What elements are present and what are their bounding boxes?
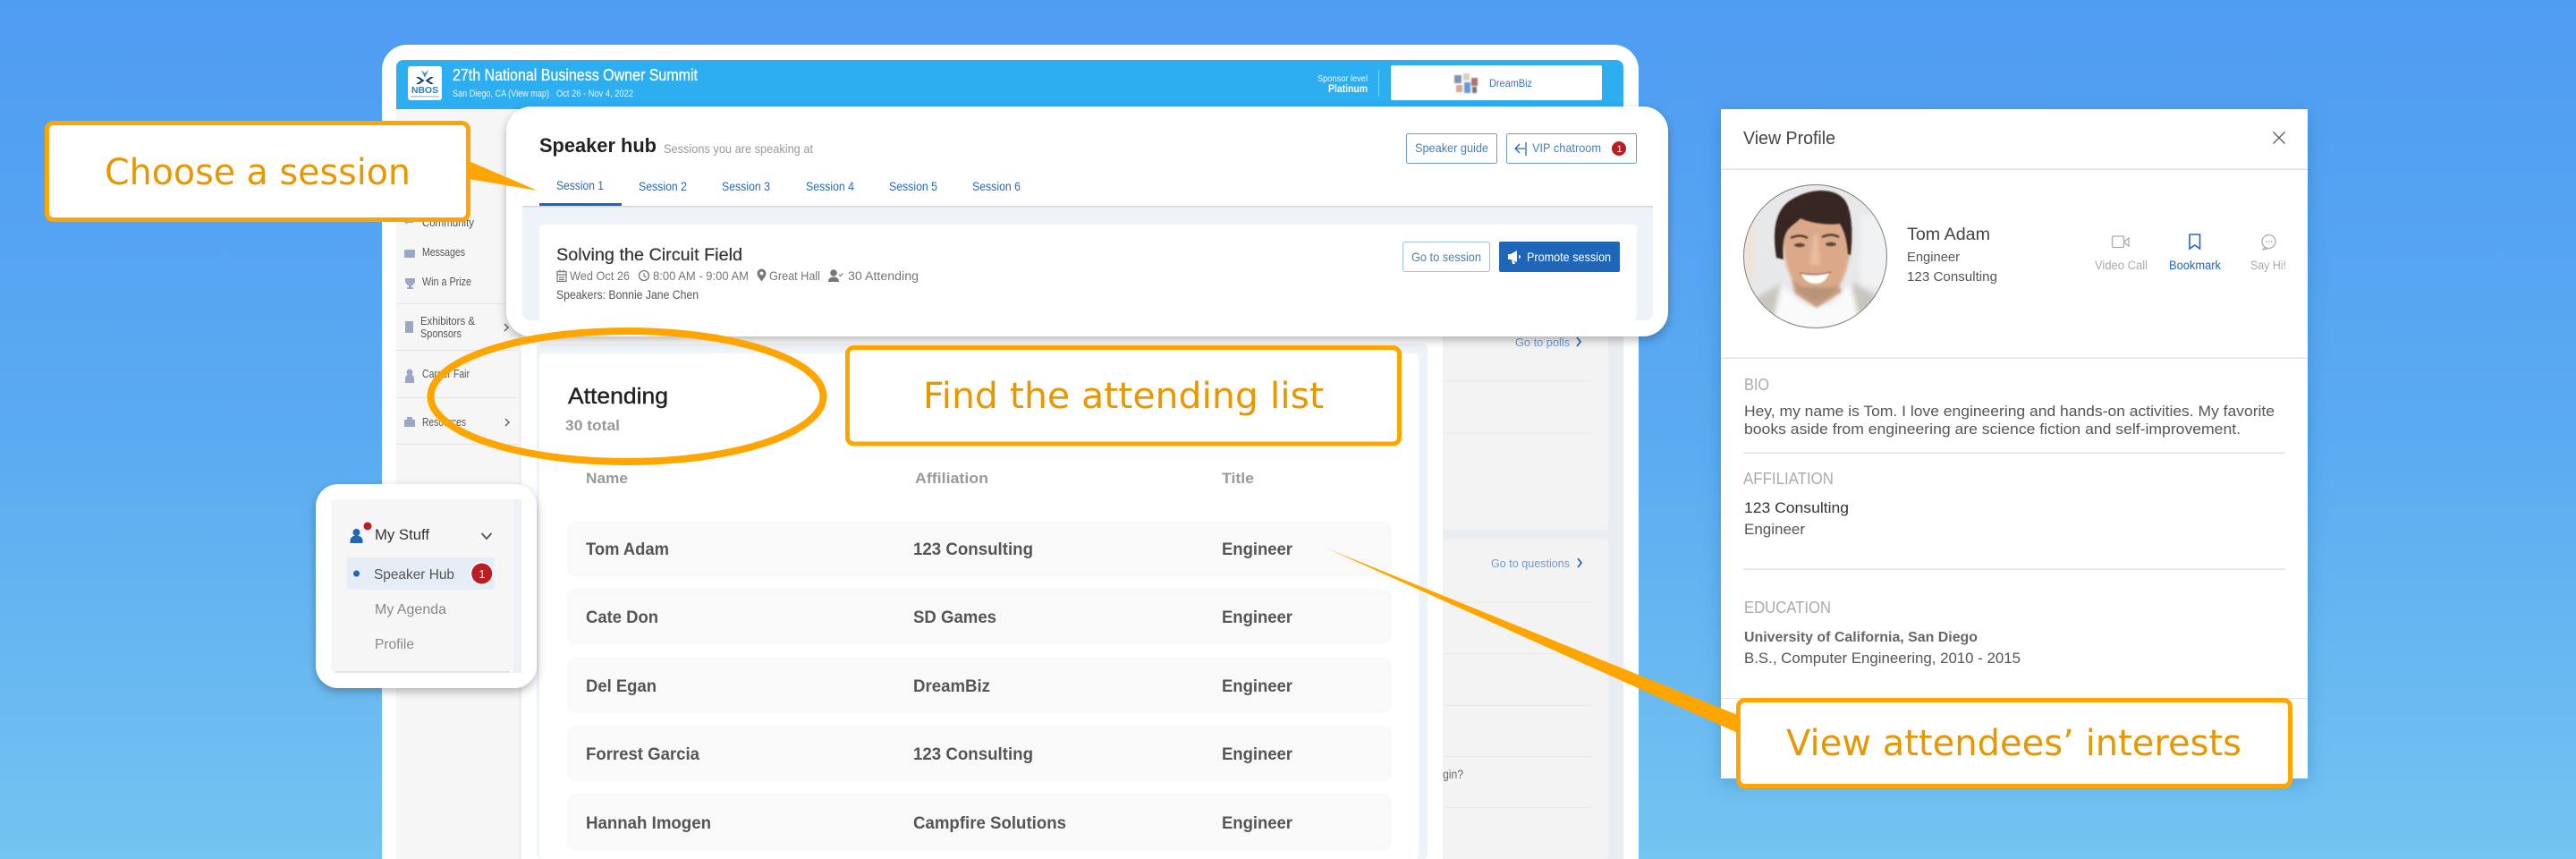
icon: sponsor logo bbox=[1454, 73, 1478, 93]
button: Go to session: Go to session bbox=[1411, 250, 1481, 264]
section: education bbox=[1744, 599, 2021, 667]
callout: Find the attending list bbox=[848, 347, 1399, 444]
callout: Find the attending list: Find the attending list bbox=[923, 376, 1324, 417]
session tabs bbox=[522, 178, 1653, 208]
left navigation sidebar bbox=[396, 109, 521, 859]
icon: close bbox=[2274, 132, 2284, 143]
right column: polls and questions bbox=[1443, 304, 1623, 859]
table row: Hannah Imogen: Campfire Solutions bbox=[913, 814, 1066, 833]
sponsor level: Platinum bbox=[1328, 82, 1368, 95]
profile panel title: View Profile bbox=[1743, 129, 1835, 149]
nav item: Community: Community bbox=[422, 216, 474, 229]
session date: Wed Oct 26 bbox=[570, 268, 630, 283]
menu item: My Agenda: My Agenda bbox=[375, 602, 446, 617]
session tabs: Session 3 bbox=[722, 179, 770, 193]
sponsor badge: DreamBiz bbox=[1391, 65, 1602, 100]
heading: Speaker hub bbox=[539, 134, 813, 157]
arrow: from attendee row to profile bbox=[1329, 549, 1740, 734]
heading: Attending: 30 total bbox=[565, 417, 620, 434]
callout: Choose a session bbox=[47, 123, 538, 220]
button: Promote session bbox=[1499, 242, 1620, 272]
table header bbox=[586, 470, 1254, 487]
section: affiliation: 123 Consulting bbox=[1744, 499, 1849, 516]
section: affiliation bbox=[1743, 470, 1849, 538]
session title: Solving the Circuit Field bbox=[556, 246, 742, 265]
hair bbox=[1775, 191, 1852, 259]
heading: Speaker hub: Sessions you are speaking at bbox=[664, 141, 813, 156]
heading: Attending: Attending bbox=[568, 384, 668, 409]
callout: View attendees' interests: View attendees’ interests bbox=[1786, 723, 2241, 764]
button: Speaker guide bbox=[1406, 134, 1497, 163]
avatar photo bbox=[1743, 184, 1887, 328]
action: Video Call bbox=[2095, 236, 2148, 272]
event location and date bbox=[453, 89, 633, 99]
table row: Cate Don: Cate Don bbox=[586, 608, 658, 627]
session tabs: Session 6 bbox=[972, 179, 1021, 193]
shirt bbox=[1772, 283, 1861, 328]
section: education: EDUCATION bbox=[1744, 599, 1831, 617]
table row: Forrest Garcia: 123 Consulting bbox=[913, 745, 1033, 764]
table row: Tom Adam: Tom Adam bbox=[586, 540, 669, 559]
menu heading: My Stuff: My Stuff bbox=[375, 526, 429, 543]
table row: Cate Don bbox=[567, 589, 1392, 644]
sponsor badge: DreamBiz: DreamBiz bbox=[1489, 77, 1532, 89]
nav item: Resources: Resources bbox=[422, 415, 466, 429]
event location and date: Oct 26 - Nov 4, 2022 bbox=[556, 89, 633, 99]
nav item: Career Fair: Career Fair bbox=[422, 367, 470, 380]
section: affiliation: AFFILIATION bbox=[1743, 470, 1834, 488]
nav item: Career Fair bbox=[405, 367, 470, 383]
menu item: Speaker Hub (active) bbox=[347, 557, 494, 590]
panel: attending list bbox=[537, 344, 1428, 859]
table row: Hannah Imogen bbox=[567, 794, 1392, 850]
menu item: Speaker Hub (active): Speaker Hub bbox=[374, 567, 454, 583]
button: VIP chatroom: VIP chatroom bbox=[1532, 140, 1601, 155]
button: Speaker guide: Speaker guide bbox=[1415, 140, 1488, 155]
table header: Name bbox=[586, 470, 628, 487]
table row: Del Egan: Del Egan bbox=[586, 677, 657, 696]
table header: Affiliation bbox=[915, 470, 988, 487]
table row: Tom Adam: Engineer bbox=[1222, 540, 1293, 559]
table row: Forrest Garcia bbox=[567, 726, 1392, 781]
face bbox=[1783, 218, 1853, 288]
nav item: Exhibitors and Sponsors: Sponsors bbox=[420, 327, 462, 340]
table row: Hannah Imogen: Hannah Imogen bbox=[586, 814, 711, 833]
table row: Del Egan: Engineer bbox=[1222, 677, 1293, 696]
link: Go to polls: Go to polls bbox=[1515, 336, 1570, 349]
table row: Forrest Garcia: Forrest Garcia bbox=[586, 745, 699, 764]
heading: Speaker hub: Speaker hub bbox=[539, 134, 657, 157]
button: VIP chatroom bbox=[1506, 134, 1637, 163]
sponsor level: Sponsor level bbox=[1318, 73, 1368, 84]
session tabs: Session 1 bbox=[556, 178, 604, 192]
callout: Choose a session: Choose a session bbox=[105, 152, 411, 193]
panel: My Stuff menu bbox=[316, 484, 537, 688]
table row: Del Egan: DreamBiz bbox=[913, 677, 990, 696]
session attending count: 30 Attending bbox=[848, 268, 919, 283]
smile bbox=[1801, 273, 1829, 284]
heading: Attending bbox=[565, 384, 668, 434]
action: Bookmark bbox=[2169, 234, 2221, 272]
session location: Great Hall bbox=[769, 268, 820, 283]
section: bio: BIO bbox=[1744, 376, 1769, 394]
table row: Del Egan bbox=[567, 657, 1392, 713]
table row: Hannah Imogen: Engineer bbox=[1222, 814, 1293, 833]
table row: Cate Don: SD Games bbox=[913, 608, 996, 627]
truncated question text: gin? bbox=[1443, 767, 1463, 781]
section: affiliation: Engineer bbox=[1744, 521, 1805, 538]
panel: event app window bbox=[382, 45, 1639, 859]
arrow: to session tabs bbox=[469, 161, 538, 191]
session card bbox=[539, 225, 1637, 320]
nav item: Messages bbox=[404, 245, 465, 259]
eyes bbox=[1794, 243, 1805, 247]
session details background bbox=[522, 208, 1653, 320]
section: bio bbox=[1744, 376, 2275, 438]
nav item: Exhibitors and Sponsors bbox=[405, 314, 508, 340]
sponsor level bbox=[1318, 70, 1379, 97]
table row: Tom Adam: 123 Consulting bbox=[913, 540, 1033, 559]
session tabs: Session 2 bbox=[639, 179, 687, 193]
table header: Title bbox=[1222, 470, 1254, 487]
action: Say Hi bbox=[2250, 234, 2286, 272]
menu heading: My Stuff bbox=[351, 523, 492, 543]
event logo: NBOS bbox=[411, 86, 438, 96]
table row: Tom Adam bbox=[567, 521, 1392, 576]
nav item: Messages: Messages bbox=[422, 245, 465, 259]
nav item: Win a Prize bbox=[405, 275, 471, 289]
attendee name and role: 123 Consulting bbox=[1907, 269, 1997, 285]
nav item: Resources bbox=[404, 415, 509, 429]
section: bio: Hey, my name is Tom. I love engineering and hands-on activities. My favorite bbox=[1744, 403, 2275, 420]
action: Say Hi: Say Hi! bbox=[2250, 259, 2286, 272]
table row: Cate Don: Engineer bbox=[1222, 608, 1293, 627]
section: education: University of California, San Diego bbox=[1744, 630, 1978, 645]
section: education: B.S., Computer Engineering, 2010 - 2015 bbox=[1744, 651, 2021, 667]
action: Video Call: Video Call bbox=[2095, 259, 2148, 272]
cardigan shoulders bbox=[1757, 281, 1876, 315]
session time: 8:00 AM - 9:00 AM bbox=[653, 268, 749, 283]
attendee name and role: Engineer bbox=[1907, 250, 1960, 265]
event location and date: San Diego, CA (View map) bbox=[453, 89, 549, 99]
menu item: Profile: Profile bbox=[375, 637, 414, 652]
action: Bookmark: Bookmark bbox=[2169, 259, 2221, 272]
table row: Forrest Garcia: Engineer bbox=[1222, 745, 1293, 764]
attendee name and role bbox=[1907, 225, 1997, 285]
nav item: Win a Prize: Win a Prize bbox=[422, 275, 471, 288]
panel: View Profile bbox=[1721, 109, 2308, 778]
event title: 27th National Business Owner Summit bbox=[453, 66, 698, 84]
nav item: Exhibitors and Sponsors: Exhibitors & bbox=[420, 314, 475, 327]
menu item: Speaker Hub (active): 1 bbox=[479, 567, 486, 581]
panel: speaker hub bbox=[506, 106, 1668, 336]
section: bio: books aside from engineering are science fiction and self-improvement. bbox=[1744, 421, 2241, 438]
brows bbox=[1791, 234, 1839, 238]
session tabs: Session 5 bbox=[889, 179, 937, 193]
highlight ellipse around Attending heading bbox=[431, 331, 823, 462]
button: Promote session: Promote session bbox=[1527, 250, 1611, 264]
link: Go to questions: Go to questions bbox=[1491, 557, 1570, 570]
button: Go to session bbox=[1402, 242, 1490, 272]
event header bar bbox=[396, 60, 1623, 109]
attendee name and role: Tom Adam bbox=[1907, 225, 1990, 244]
event logo bbox=[408, 66, 442, 100]
callout: View attendees' interests bbox=[1739, 700, 2290, 786]
nav item: Community bbox=[404, 216, 474, 229]
neck bbox=[1792, 279, 1842, 308]
speakers line: Speakers: Bonnie Jane Chen bbox=[556, 288, 699, 302]
button: VIP chatroom: 1 bbox=[1617, 144, 1623, 155]
session tabs: Session 4 bbox=[806, 179, 854, 193]
